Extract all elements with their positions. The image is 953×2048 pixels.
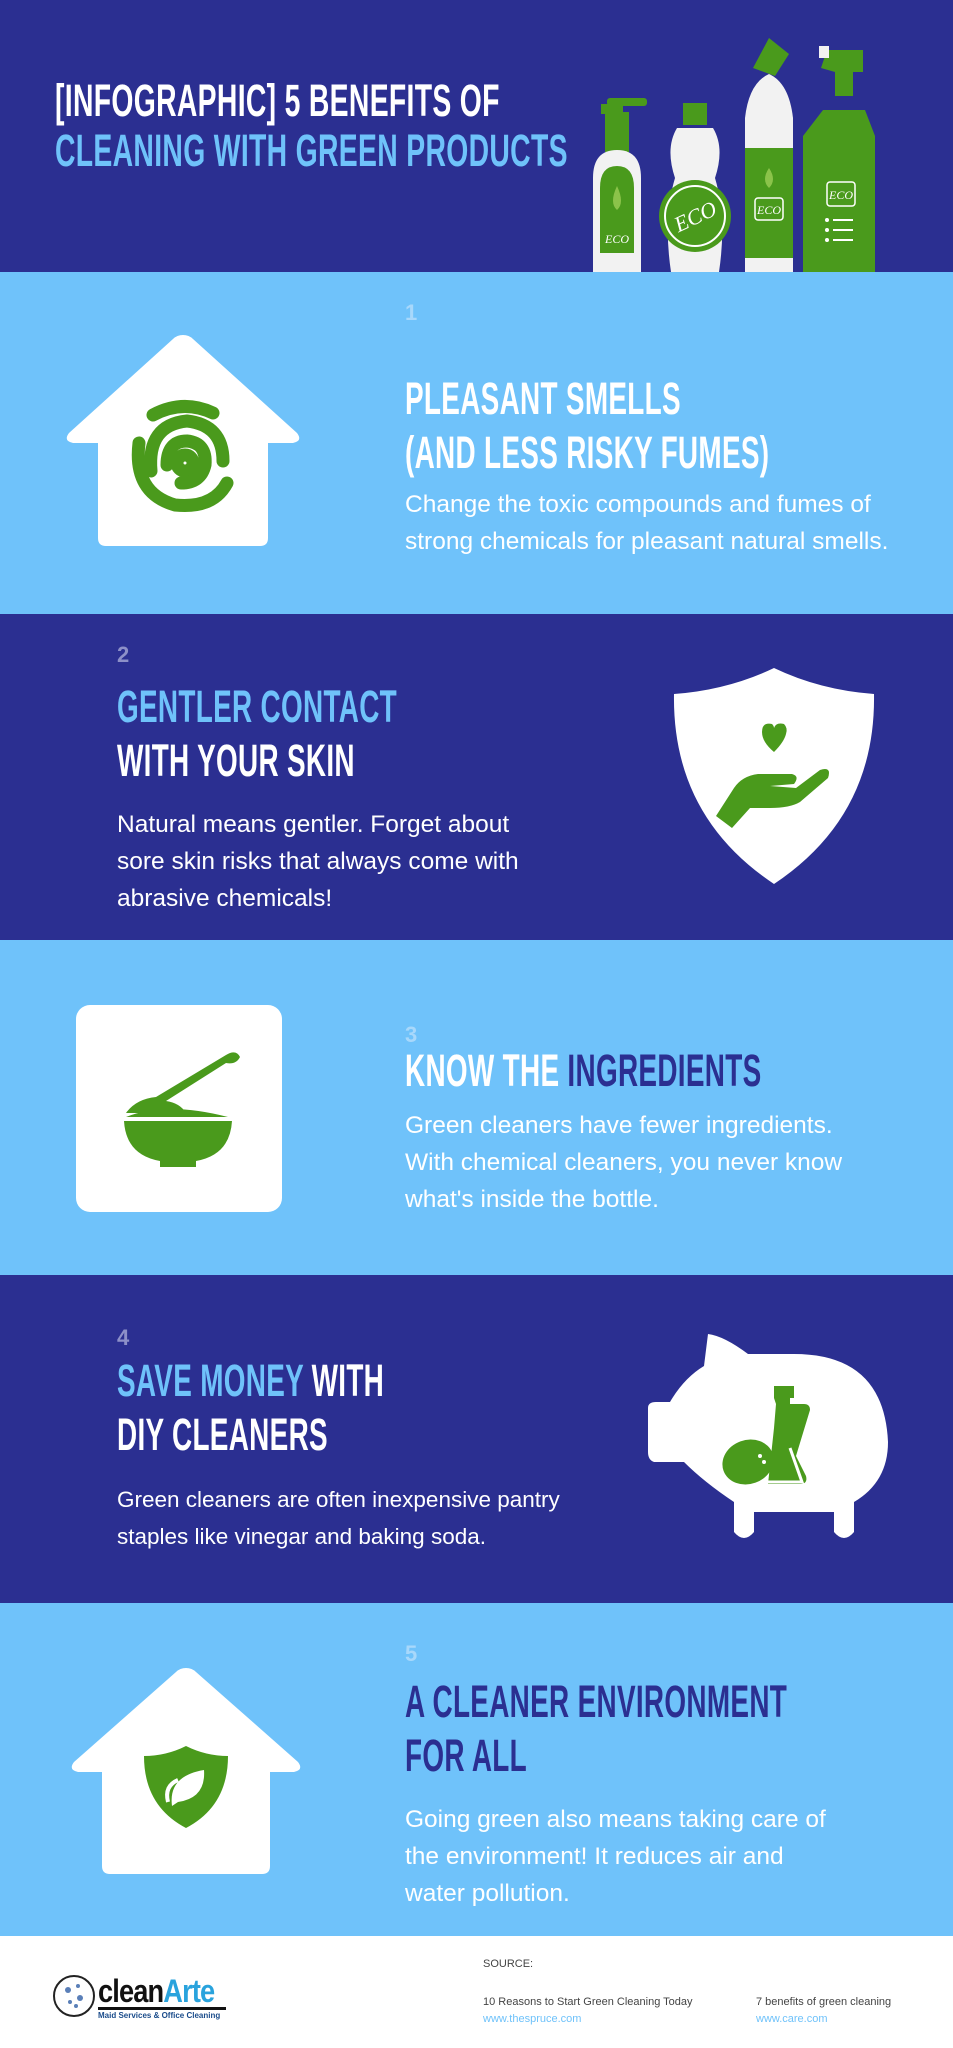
title: CLEANING WITH GREEN PRODUCTS [55, 125, 568, 176]
footer [0, 1936, 953, 2048]
text: sore skin risks that always come with [117, 848, 519, 875]
panel: 5 cleaner environment [0, 1603, 953, 1936]
sources: 7 benefits of green cleaning [756, 1996, 891, 2008]
number 2: 2 [117, 642, 129, 667]
illustration: eco bottles: ECO [828, 188, 853, 202]
sources [483, 1958, 891, 2025]
sources: 10 Reasons to Start Green Cleaning Today [483, 1996, 693, 2008]
title [55, 75, 568, 176]
heading: FOR ALL [405, 1730, 527, 1781]
heading: KNOW THE INGREDIENTS [405, 1045, 762, 1096]
heading [117, 1355, 384, 1460]
sources: www.thespruce.com [483, 2013, 581, 2025]
header [0, 0, 953, 272]
icon: house with rose [66, 335, 300, 546]
text: what's inside the bottle. [405, 1186, 659, 1213]
sources: www.care.com [756, 2013, 828, 2025]
illustration: eco bottles: ECO [756, 203, 781, 217]
heading: (AND LESS RISKY FUMES) [405, 427, 769, 478]
number 3: 3 [405, 1022, 417, 1047]
text: staples like vinegar and baking soda. [117, 1524, 486, 1549]
icon: bowl with spoon [76, 1005, 282, 1212]
heading: DIY CLEANERS [117, 1409, 328, 1460]
illustration: eco bottles: ECO [669, 196, 721, 238]
icon: piggy bank with lemon and oil [648, 1334, 888, 1538]
text: Change the toxic compounds and fumes of [405, 491, 871, 518]
heading: GENTLER CONTACT [117, 681, 397, 732]
text: With chemical cleaners, you never know [405, 1149, 842, 1176]
text: the environment! It reduces air and [405, 1843, 784, 1870]
logo: Maid Services & Office Cleaning [98, 2011, 220, 2020]
number 1: 1 [405, 300, 417, 325]
icon: shield with hand and heart [674, 668, 874, 884]
text: Green cleaners are often inexpensive pantry [117, 1487, 560, 1512]
text [117, 811, 519, 912]
heading: PLEASANT SMELLS [405, 373, 681, 424]
illustration: eco bottles: ECO [604, 232, 629, 246]
heading: WITH YOUR SKIN [117, 735, 355, 786]
text: abrasive chemicals! [117, 885, 332, 912]
text: Green cleaners have fewer ingredients. [405, 1112, 833, 1139]
logo [53, 1973, 226, 2020]
text: Natural means gentler. Forget about [117, 811, 509, 838]
text: Going green also means taking care of [405, 1806, 826, 1833]
number 5: 5 [405, 1641, 417, 1666]
panel: 1 pleasant smells [0, 272, 953, 614]
heading [405, 1676, 787, 1781]
text [405, 491, 888, 555]
sources: SOURCE: [483, 1958, 533, 1970]
text [405, 1806, 826, 1907]
number 4: 4 [117, 1325, 129, 1350]
illustration: eco bottles [593, 38, 875, 272]
panel: 2 gentler contact [0, 614, 953, 940]
icon: house with shield leaf [72, 1668, 300, 1874]
panel: 4 save money [0, 1275, 953, 1603]
heading [117, 681, 397, 786]
text: strong chemicals for pleasant natural smells. [405, 528, 888, 555]
text: water pollution. [405, 1880, 570, 1907]
heading: A CLEANER ENVIRONMENT [405, 1676, 787, 1727]
text [405, 1112, 842, 1213]
heading: SAVE MONEY WITH [117, 1355, 384, 1406]
title: [INFOGRAPHIC] 5 BENEFITS OF [55, 75, 500, 126]
panel: 3 know the ingredients [0, 940, 953, 1275]
heading [405, 373, 769, 478]
logo: cleanArte [98, 1973, 214, 2009]
text [117, 1487, 560, 1549]
